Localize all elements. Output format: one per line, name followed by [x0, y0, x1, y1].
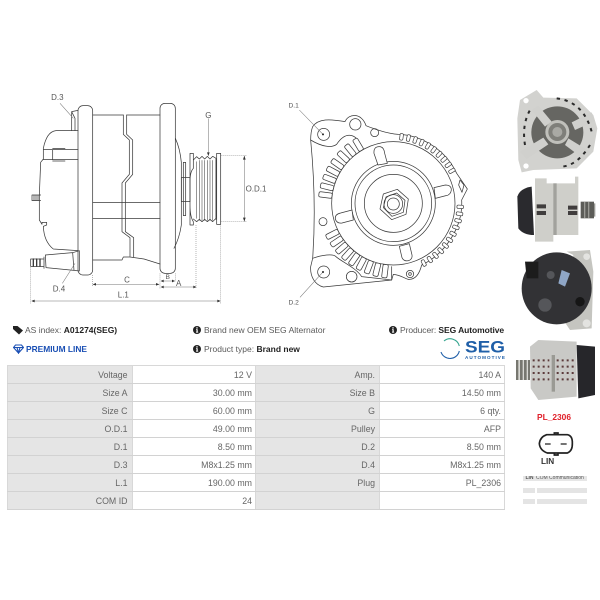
info row: product type: Product type: Brand new	[204, 344, 300, 354]
hub nut	[380, 189, 408, 220]
pin table	[523, 476, 587, 504]
row: D.1 and D.2: 8.50 mm	[218, 442, 252, 452]
row: D.1 and D.2: 8.50 mm	[467, 442, 501, 452]
connector label: LIN	[541, 457, 554, 466]
logo ring	[441, 339, 459, 358]
row: size A and size B	[8, 384, 501, 401]
rotor circles	[332, 142, 455, 265]
icon: info	[389, 326, 397, 334]
photo: rear of alternator	[522, 250, 593, 330]
icon: diamond	[13, 344, 24, 354]
row: COM ID: 24	[242, 496, 252, 506]
row: O.D.1 and pulley: 49.00 mm	[213, 424, 252, 434]
plug code: PL_2306	[537, 412, 571, 422]
specification table	[7, 365, 505, 510]
row: size A and size B: 14.50 mm	[462, 388, 501, 398]
row: L.1 and plug: 190.00 mm	[208, 478, 252, 488]
logo subtitle: AUTOMOTIVE	[465, 355, 505, 360]
pin row: empty	[523, 488, 587, 493]
dimension: G and O.D.1: O.D.1	[246, 184, 267, 193]
front dome	[174, 138, 181, 248]
logo wordmark: SEG	[465, 338, 505, 356]
row: size C and G: Size C	[102, 406, 128, 416]
row: size C and G	[8, 402, 501, 419]
icon: tags	[13, 326, 23, 334]
row: size C and G: 60.00 mm	[213, 406, 252, 416]
row: L.1 and plug: PL_2306	[466, 478, 501, 488]
row: D.3 and D.4	[8, 456, 501, 473]
dimension: C, B, A, L.1	[31, 224, 221, 303]
row: L.1 and plug: L.1	[115, 478, 128, 488]
row: D.3 and D.4: D.4	[361, 460, 375, 470]
photo: angled side of alternator	[516, 340, 595, 400]
row: COM ID: COM ID	[96, 496, 128, 506]
row: size C and G: 6 qty.	[480, 406, 501, 416]
row: O.D.1 and pulley: AFP	[484, 424, 501, 434]
icon: LIN plug	[539, 433, 572, 455]
row: O.D.1 and pulley	[8, 420, 501, 437]
row: D.1 and D.2: D.2	[361, 442, 375, 452]
pulley	[181, 153, 221, 225]
housing outline	[311, 116, 467, 287]
row: COM ID	[8, 492, 379, 509]
icon: info	[193, 326, 201, 334]
rear flange	[78, 106, 93, 275]
D.4 connector	[31, 251, 79, 271]
dimension: C, B, A, L.1: L.1	[118, 291, 129, 300]
info row: brand new OEM: Brand new OEM SEG Alternator	[204, 325, 325, 335]
row: size A and size B: Size B	[350, 388, 375, 398]
rear cover	[39, 110, 78, 251]
row: voltage and amperage: 140 A	[478, 370, 501, 380]
row: voltage and amperage: 12 V	[234, 370, 252, 380]
row: size A and size B: Size A	[103, 388, 128, 398]
row: D.1 and D.2	[8, 438, 501, 455]
dimension: C, B, A, L.1: B	[165, 274, 170, 281]
dimension: C, B, A, L.1: A	[176, 279, 182, 288]
pin row: empty second	[523, 499, 587, 504]
premium line badge: PREMIUM LINE	[26, 344, 87, 354]
cooling slots	[319, 133, 464, 278]
icon: info	[193, 345, 201, 353]
row: size A and size B: 30.00 mm	[213, 388, 252, 398]
spokes	[335, 147, 451, 261]
dimension: G and O.D.1	[51, 93, 267, 293]
labels D.1 and D.2	[288, 102, 324, 306]
info row: AS index: AS index: A01274(SEG)	[25, 325, 117, 335]
photo: side of alternator	[517, 177, 595, 242]
row: voltage and amperage: Voltage	[98, 370, 128, 380]
row: D.1 and D.2: D.1	[114, 442, 128, 452]
row: L.1 and plug: Plug	[357, 478, 375, 488]
mounting holes	[318, 119, 464, 282]
dimension: C, B, A, L.1: C	[124, 275, 130, 284]
info row: producer: Producer: SEG Automotive	[400, 325, 504, 335]
front flange	[160, 103, 175, 273]
photo: front of alternator	[517, 90, 597, 172]
inner lobes and ribs	[311, 135, 392, 280]
dimension: G and O.D.1: G	[205, 111, 211, 120]
row: D.3 and D.4: M8x1.25 mm	[201, 460, 252, 470]
row: size C and G: G	[368, 406, 375, 416]
dimension: G and O.D.1: D.4	[53, 284, 66, 293]
row: voltage and amperage	[8, 366, 501, 383]
row: D.3 and D.4: D.3	[114, 460, 128, 470]
row: D.3 and D.4: M8x1.25 mm	[450, 460, 501, 470]
row: L.1 and plug	[8, 474, 501, 491]
dimension: G and O.D.1: D.3	[51, 93, 64, 102]
stator body	[93, 115, 160, 264]
labels D.1 and D.2: D.1	[288, 102, 299, 109]
row: O.D.1 and pulley: Pulley	[351, 424, 375, 434]
rear stud	[32, 195, 41, 201]
row: voltage and amperage: Amp.	[354, 370, 375, 380]
row: O.D.1 and pulley: O.D.1	[105, 424, 128, 434]
labels D.1 and D.2: D.2	[288, 299, 299, 306]
